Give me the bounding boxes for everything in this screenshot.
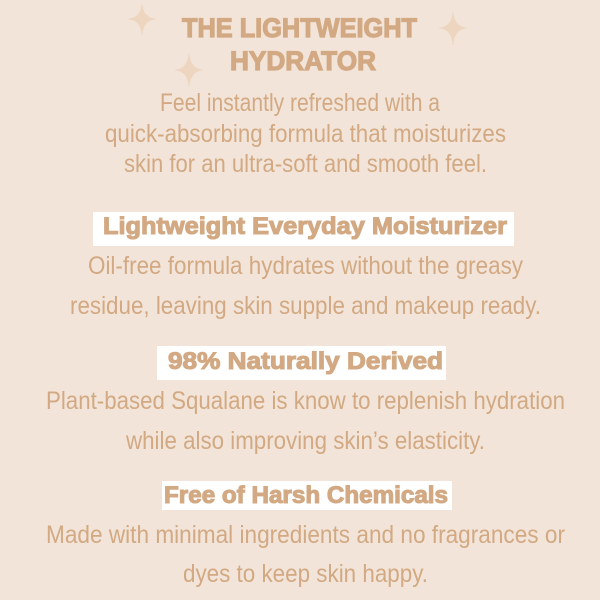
icon: sparkle lower left — [175, 53, 203, 87]
body text: plant-based squalane — [46, 387, 565, 455]
title — [182, 13, 417, 76]
title: HYDRATOR — [230, 46, 376, 76]
body text: minimal ingredients: dyes to keep skin happy. — [183, 560, 428, 588]
body text: oil-free formula — [70, 252, 541, 320]
heading: lightweight everyday moisturizer: Lightweight Everyday Moisturizer — [103, 213, 507, 240]
body text: minimal ingredients — [46, 521, 565, 588]
intro text: quick-absorbing formula that moisturizes — [105, 120, 506, 148]
heading: 98% naturally derived — [157, 346, 446, 380]
section: naturally derived — [46, 346, 565, 455]
body text: oil-free formula: Oil-free formula hydrates without the greasy — [88, 252, 523, 280]
intro text — [105, 89, 506, 178]
icon: sparkle right — [439, 12, 467, 45]
section: free of harsh chemicals — [46, 481, 565, 588]
icon: sparkle top left — [128, 4, 156, 35]
intro text: Feel instantly refreshed with a — [160, 89, 440, 117]
intro text: skin for an ultra-soft and smooth feel. — [124, 150, 487, 178]
section: lightweight everyday moisturizer — [70, 212, 541, 320]
title: THE LIGHTWEIGHT — [182, 13, 417, 43]
heading: free of harsh chemicals: Free of Harsh Chemicals — [164, 482, 448, 509]
heading: 98% naturally derived: 98% Naturally Derived — [168, 348, 443, 375]
body text: plant-based squalane: while also improving skin’s elasticity. — [125, 427, 485, 455]
body text: oil-free formula: residue, leaving skin supple and makeup ready. — [70, 292, 541, 320]
